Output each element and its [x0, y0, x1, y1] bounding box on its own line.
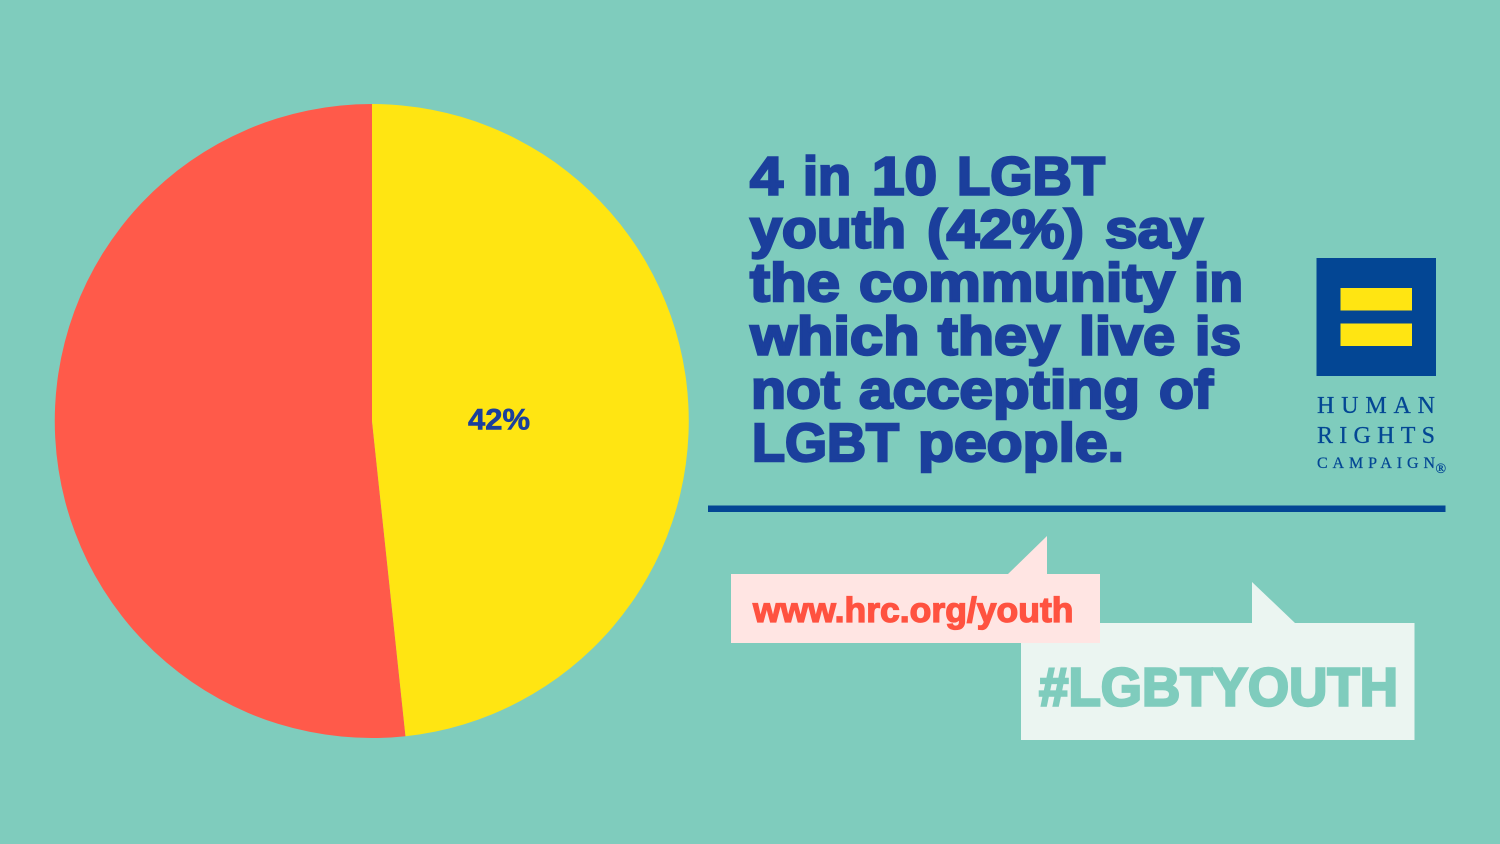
- headline: (42%): [927, 200, 1084, 260]
- pie slice: 42%: [372, 104, 689, 736]
- headline: LGBT: [957, 148, 1105, 206]
- headline: in: [1194, 254, 1243, 313]
- logo: Human Rights Campaign: [1316, 258, 1446, 477]
- hashtag text: #LGBTYOUTH: [1039, 658, 1398, 718]
- headline: [749, 148, 1243, 473]
- headline: say: [1105, 200, 1203, 260]
- website text: www.hrc.org/youth: [752, 591, 1074, 630]
- logo equals sign, bottom bar: [1340, 324, 1412, 346]
- headline: LGBT: [752, 414, 899, 473]
- headline: the: [750, 254, 840, 313]
- headline: people.: [918, 414, 1124, 473]
- divider line: [708, 506, 1446, 512]
- pie chart: [55, 104, 689, 738]
- speech bubble: hashtag: [1021, 582, 1414, 740]
- speech bubble: website: [731, 536, 1100, 643]
- logo square: [1316, 258, 1436, 376]
- pie slice: remainder: [55, 104, 406, 738]
- headline: in: [803, 148, 851, 206]
- headline: live: [1079, 308, 1175, 366]
- headline: which: [749, 308, 920, 366]
- headline: youth: [750, 200, 906, 260]
- logo wordmark: CAMPAIGN: [1317, 455, 1435, 472]
- headline: is: [1195, 308, 1241, 366]
- headline: not: [751, 361, 840, 420]
- logo wordmark: ®: [1436, 462, 1446, 477]
- logo equals sign, top bar: [1340, 288, 1412, 310]
- logo wordmark: RIGHTS: [1317, 423, 1435, 449]
- headline: 10: [872, 148, 937, 206]
- headline: of: [1159, 361, 1213, 420]
- headline: accepting: [859, 361, 1140, 420]
- headline: 4: [750, 148, 783, 206]
- headline: community: [859, 254, 1175, 313]
- headline: they: [938, 308, 1060, 366]
- logo wordmark: HUMAN: [1317, 393, 1435, 419]
- pie label: 42%: 42%: [468, 404, 530, 436]
- logo wordmark: [1317, 393, 1446, 477]
